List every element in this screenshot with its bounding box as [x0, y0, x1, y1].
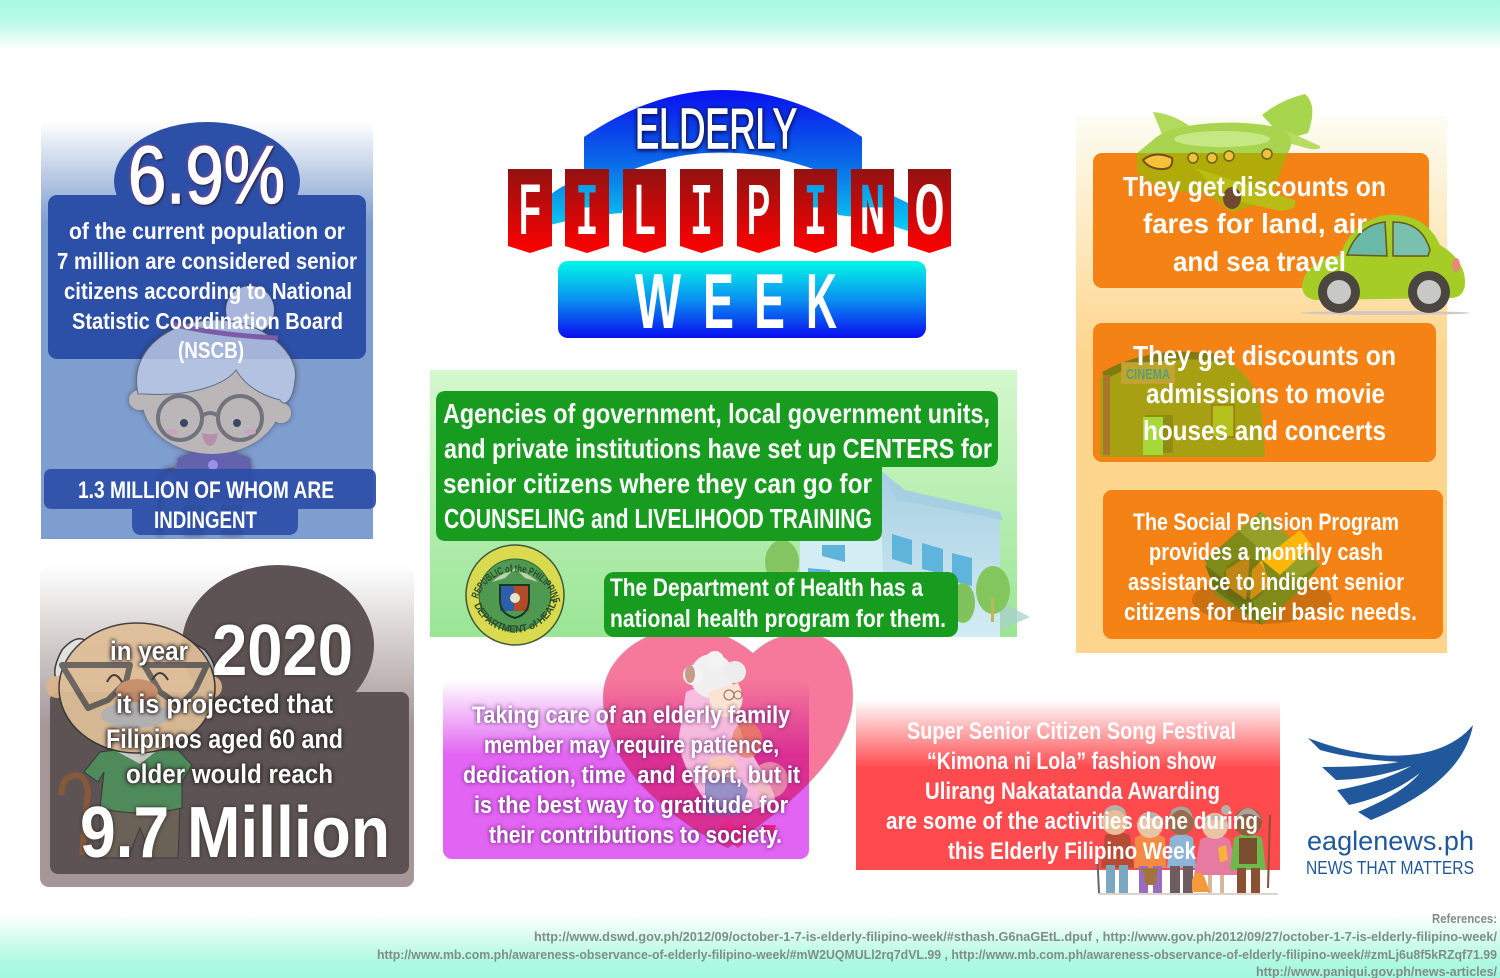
panel: activities	[856, 700, 1280, 895]
red letter banners: I	[804, 175, 828, 255]
care text: is the best way to gratitude for	[474, 792, 788, 819]
cinema discount text: They get discounts on	[1133, 340, 1396, 371]
activities text	[886, 718, 1258, 865]
references: http://www.dswd.gov.ph/2012/09/october-1-7-is-elderly-filipino-week/#sthash.G6naGEtL.dpuf , http://www.gov.ph/2012/09/27/october-1-7-is-elderly-filipino-week/	[534, 929, 1497, 944]
red letter banners: N	[860, 175, 886, 255]
panel: centers	[430, 370, 1030, 646]
illustration: grandmother and grandchildren	[679, 651, 788, 848]
cinema discount text: admissions to movie	[1146, 378, 1385, 409]
bottom mint band	[0, 914, 1500, 978]
population text: of the current population or	[69, 218, 345, 244]
care text: member may require patience,	[484, 732, 779, 759]
indigent strip	[44, 469, 376, 535]
social pension text: citizens for their basic needs.	[1124, 599, 1417, 626]
heading: WEEK: E	[754, 257, 785, 345]
illustration: building	[765, 470, 1030, 637]
centers text: and private institutions have set up CENTERS for	[444, 433, 992, 464]
indigent text	[78, 477, 334, 534]
illustration: cinema: CINEMA	[1126, 366, 1170, 383]
centers text	[443, 398, 992, 534]
red letter banners: P	[746, 175, 770, 255]
activities text: this Elderly Filipino Week	[948, 838, 1197, 865]
red letter banners	[508, 169, 951, 255]
year figure: 2020	[212, 611, 353, 691]
logo tagline: NEWS THAT MATTERS	[1306, 858, 1474, 878]
heart illustration	[603, 628, 853, 848]
population text: citizens according to National	[64, 278, 352, 304]
text box background	[48, 195, 366, 359]
panel: benefits	[1076, 94, 1470, 653]
fare discount text: and sea travel	[1173, 246, 1346, 277]
text box background	[50, 692, 409, 874]
social pension text: The Social Pension Program	[1133, 509, 1399, 536]
text: projection: it is projected that	[116, 689, 333, 719]
population text: (NSCB)	[178, 337, 244, 363]
logo: eaglenews.ph	[1306, 725, 1474, 878]
illustration: car	[1300, 215, 1470, 315]
panel: care	[443, 651, 809, 859]
red letter banners: O	[914, 175, 944, 255]
fare discount text	[1123, 171, 1386, 277]
health program text: national health program for them.	[610, 605, 946, 633]
social pension text: provides a monthly cash	[1149, 539, 1383, 566]
fare discount text: fares for land, air	[1143, 208, 1367, 239]
centers text: COUNSELING and LIVELIHOOD TRAINING	[444, 503, 872, 534]
care text: Taking care of an elderly family	[472, 702, 791, 729]
illustration: grandfather	[46, 623, 222, 858]
social pension text	[1124, 509, 1417, 626]
care text: their contributions to society.	[489, 822, 782, 849]
activities text: are some of the activities done during	[886, 808, 1258, 835]
circle behind year	[182, 565, 374, 725]
activities text: “Kimona ni Lola” fashion show	[927, 748, 1216, 775]
icon: eagle wing	[1308, 725, 1473, 820]
care text	[463, 702, 800, 849]
box: fare discounts	[1093, 153, 1429, 288]
logo name: eaglenews.ph	[1307, 826, 1474, 856]
heading: WEEK: K	[806, 257, 837, 345]
care text: dedication, time and effort, but it	[463, 762, 800, 789]
centers text: senior citizens where they can go for	[443, 468, 872, 499]
population text: 7 million are considered senior	[57, 248, 357, 274]
illustration: cinema	[1100, 352, 1265, 457]
illustration: cash stacks	[1192, 512, 1332, 625]
health program text	[610, 574, 946, 633]
red letter banners: L	[632, 175, 656, 255]
fare discount text: They get discounts on	[1123, 171, 1386, 202]
red letter banners: I	[690, 175, 714, 255]
social pension text: assistance to indigent senior	[1128, 569, 1404, 596]
activities text: Super Senior Citizen Song Festival	[907, 718, 1236, 745]
percentage figure: 6.9%	[128, 130, 285, 221]
box: cinema discounts	[1093, 323, 1436, 462]
heading: WEEK: E	[703, 257, 734, 345]
activities text: Ulirang Nakatatanda Awarding	[925, 778, 1220, 805]
red letter banners: F	[518, 175, 542, 255]
text: projection	[106, 689, 343, 789]
panel: 2020 projection	[40, 565, 414, 887]
heading: ELDERLY: ELDERLY	[635, 97, 797, 161]
text: in year: in year	[110, 636, 188, 666]
seal: Department of Health: DEPARTMENT of HEALTH	[474, 597, 558, 633]
text: projection: Filipinos aged 60 and	[106, 724, 343, 754]
references	[377, 911, 1497, 978]
centers text: Agencies of government, local government units,	[443, 398, 990, 429]
figure: 9.7 Million: 9.7 Million	[80, 793, 390, 873]
WEEK bar	[558, 261, 926, 338]
box: social pension	[1103, 490, 1443, 639]
health program text: The Department of Health has a	[610, 574, 924, 602]
seal: Department of Health	[465, 544, 565, 646]
cinema discount text: houses and concerts	[1143, 415, 1386, 446]
heading: WEEK	[635, 257, 837, 345]
panel: population statistic	[41, 122, 376, 539]
population text	[57, 218, 357, 363]
seal: Department of Health: REPUBLIC of the PHILIPPINES	[471, 564, 560, 604]
heading: WEEK: W	[635, 257, 681, 345]
dome behind percentage	[114, 122, 300, 240]
illustration: grandmother	[129, 286, 295, 535]
illustration: five seniors	[1097, 805, 1278, 895]
illustration: airplane	[1137, 94, 1320, 212]
population text: Statistic Coordination Board	[72, 308, 343, 334]
indigent text: INDINGENT	[154, 507, 257, 534]
cinema discount text	[1133, 340, 1396, 446]
blue arch behind title	[550, 90, 908, 231]
text: projection: older would reach	[126, 759, 333, 789]
centers text box	[436, 391, 998, 541]
red letter banners: I	[575, 175, 599, 255]
top mint band	[0, 0, 1500, 50]
indigent text: 1.3 MILLION OF WHOM ARE	[78, 477, 334, 504]
title: Elderly Filipino Week	[508, 90, 951, 345]
health program box	[604, 572, 958, 637]
